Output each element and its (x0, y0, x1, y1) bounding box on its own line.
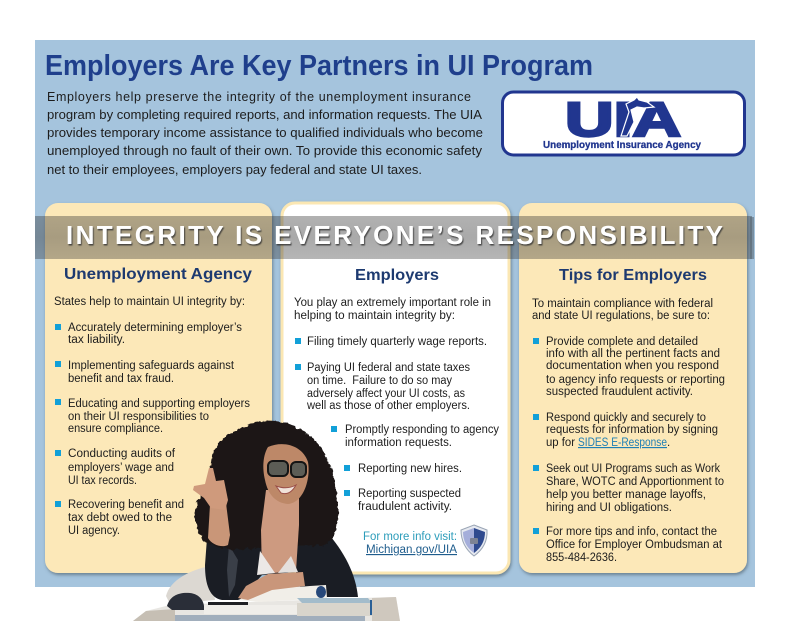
chair backdrop (166, 566, 215, 604)
sleeve highlight (227, 545, 238, 597)
text: tips list: info with all the pertinent facts and (546, 348, 720, 360)
neck and chest (261, 490, 299, 574)
intro paragraph: net to their employees, employers pay federal and state UI taxes. (47, 163, 422, 177)
glasses (268, 461, 306, 477)
text: employers list: information requests. (345, 437, 452, 449)
text: employers list: fraudulent activity. (358, 501, 452, 513)
text: tips list: help you better manage layoffs, (546, 489, 706, 501)
text: tips list: to agency info requests or reporting (546, 374, 725, 386)
text: employers list: well as those of other employers. (306, 400, 470, 412)
icon: shield (461, 525, 487, 556)
book spine (316, 586, 326, 598)
text: tips list: hiring and UI obligations. (546, 502, 672, 514)
UIA logo: UIA (565, 94, 681, 147)
intro paragraph: unemployed through no fault of their own. To provide this economic safety (47, 144, 483, 158)
text: tips list: documentation when you respond (546, 360, 719, 372)
text: tips list: and state UI regulations, be sure to: (532, 310, 710, 322)
heading: unemployment agency: Unemployment Agency (64, 266, 252, 283)
text: unemployment agency list: on their UI responsibilities to (68, 411, 209, 423)
text: tips list: . (667, 437, 670, 449)
text: tips list: Respond quickly and securely to (546, 412, 706, 424)
banner (35, 216, 754, 259)
smile (276, 485, 296, 494)
face (263, 444, 309, 504)
jacket (205, 530, 358, 600)
hair (195, 421, 338, 550)
UIA logo: Unemployment Insurance Agency (543, 139, 701, 151)
open book (238, 585, 327, 602)
text: employers list: Reporting new hires. (358, 463, 462, 475)
text: tips list: suspected fraudulent activity. (546, 386, 693, 398)
UIA logo (502, 92, 744, 155)
text: tips list: For more tips and info, contact the (546, 526, 717, 538)
panel: unemployment agency (45, 203, 272, 573)
intro paragraph: Employers help preserve the integrity of the unemployment insurance (47, 90, 471, 104)
text: unemployment agency list: ensure compliance. (68, 423, 163, 435)
text: tips list: Provide complete and detailed (546, 336, 698, 348)
text: tips list: Share, WOTC and Apportionment to (546, 476, 724, 488)
intro paragraph: provides temporary income assistance to qualified individuals who become (47, 126, 483, 140)
phone (208, 602, 248, 605)
text: employers list: You play an extremely important role in (294, 297, 491, 309)
text: employers list (294, 297, 499, 513)
text: unemployment agency list: Educating and supporting employers (68, 398, 250, 410)
raised hand (193, 468, 228, 510)
text: tips list: To maintain compliance with federal (532, 298, 713, 310)
more info link: Michigan.gov/UIA (366, 544, 457, 556)
text: tips list: requests for information by signing (546, 424, 718, 436)
resting hand (238, 572, 305, 600)
text: unemployment agency list: States help to maintain UI integrity by: (54, 296, 245, 308)
mouse (167, 593, 204, 610)
more info link (363, 531, 457, 556)
intro paragraph: program by completing required reports, and information requests. The UIA (47, 108, 483, 122)
heading: employers: Employers (355, 267, 439, 284)
text: unemployment agency list: Recovering benefit and (68, 499, 184, 511)
text: unemployment agency list (54, 296, 250, 537)
text: tips list (532, 298, 725, 564)
title: Employers Are Key Partners in UI Program (45, 50, 593, 82)
banner: INTEGRITY IS EVERYONE’S RESPONSIBILITY (66, 220, 723, 250)
text: employers list: adversely affect your UI costs, as (307, 388, 465, 400)
more info link: For more info visit: (363, 531, 457, 543)
text: employers list: helping to maintain integrity by: (294, 310, 455, 322)
text: employers list: Filing timely quarterly wage reports. (307, 336, 487, 348)
text: tips list: 855-484-2636. (546, 552, 617, 564)
text: employers list: Reporting suspected (358, 488, 461, 500)
book stack (297, 598, 372, 616)
blouse (257, 551, 298, 575)
illustration: woman at desk (133, 421, 400, 621)
text: tips list: Seek out UI Programs such as Work (546, 463, 720, 475)
text: unemployment agency list: UI agency. (68, 525, 120, 537)
raised arm (208, 503, 230, 546)
text: unemployment agency list: benefit and tax fraud. (68, 373, 174, 385)
text: employers list: on time. Failure to do so may (307, 375, 452, 387)
panel: tips for employers (519, 203, 747, 573)
panel: employers (282, 203, 509, 573)
text: unemployment agency list: Conducting audits of (68, 448, 176, 460)
text: unemployment agency list: employers’ wage and (68, 462, 174, 474)
text: unemployment agency list: Implementing safeguards against (68, 360, 235, 372)
text: employers list: Promptly responding to agency (345, 424, 499, 436)
text: unemployment agency list: UI tax records. (68, 475, 137, 487)
text: tips list: Office for Employer Ombudsman at (546, 539, 723, 551)
papers (204, 605, 300, 614)
text: tips list: up for (546, 437, 575, 449)
heading: tips for employers: Tips for Employers (559, 267, 707, 284)
desk (133, 597, 400, 621)
text: tips list: SIDES E-Response (578, 437, 667, 449)
intro paragraph (47, 90, 483, 177)
text: unemployment agency list: Accurately determining employer’s (68, 322, 242, 334)
text: unemployment agency list: tax liability. (68, 334, 125, 346)
text: unemployment agency list: tax debt owed to the (68, 512, 172, 524)
text: employers list: Paying UI federal and state taxes (307, 362, 470, 374)
